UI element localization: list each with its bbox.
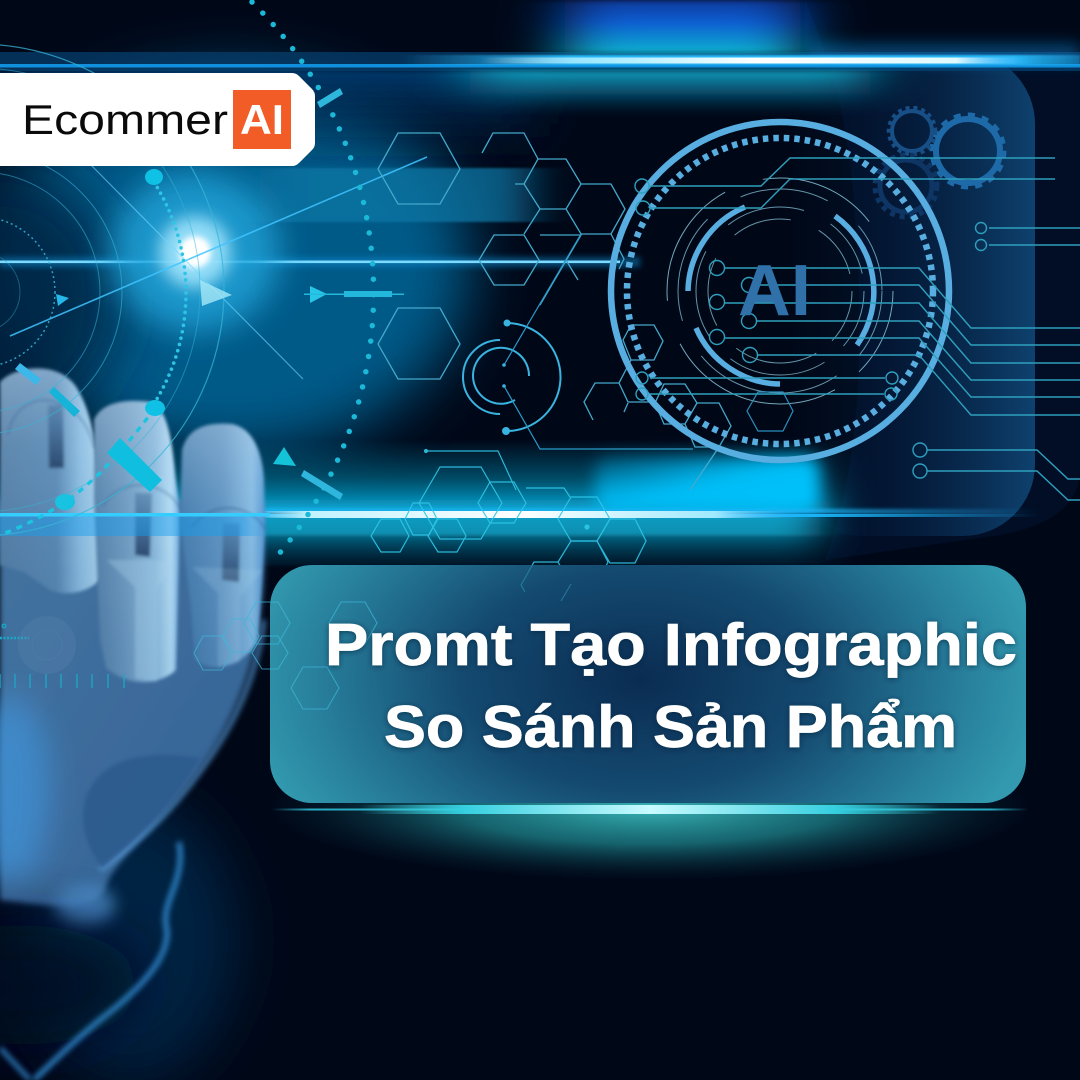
arc node bottom <box>145 400 165 416</box>
inner segmented arcs <box>688 207 874 384</box>
hexagon network <box>378 133 731 490</box>
small hexagon in emblem <box>747 392 793 431</box>
arc node top <box>145 169 163 185</box>
robot hand <box>0 368 270 1045</box>
title text <box>325 612 1017 760</box>
palm shadow bottom <box>0 925 140 1045</box>
finger three <box>180 424 265 668</box>
logo badge <box>0 73 315 166</box>
title line one: Promt Tạo Infographic <box>325 612 1017 678</box>
AI emblem <box>611 108 1080 500</box>
dotted arc inner <box>0 169 186 535</box>
cyan markers <box>15 88 404 500</box>
logo square <box>233 90 291 149</box>
palm <box>0 500 264 906</box>
title panel <box>194 562 1026 803</box>
outer ring <box>611 122 949 460</box>
dashed ring <box>627 138 933 444</box>
emblem label AI: AI <box>738 251 811 331</box>
light line across fingers <box>0 513 270 516</box>
HUD rings left <box>0 44 224 536</box>
logo AI: AI <box>240 96 284 143</box>
palm rim light <box>100 620 264 870</box>
light band across fingers <box>0 516 270 536</box>
thin arcs <box>667 178 893 404</box>
title underline glow <box>270 736 1030 880</box>
logo word: Ecommer <box>22 96 228 143</box>
middle light band <box>0 168 640 267</box>
dotted arc outer <box>252 2 374 562</box>
light flare <box>10 157 427 379</box>
palm glow <box>0 695 50 885</box>
hud ticks bottom left <box>0 616 124 688</box>
gears <box>875 108 1004 217</box>
wrist outline <box>0 842 180 1080</box>
hexagons on lower band <box>371 450 646 601</box>
lower light band <box>0 440 1040 566</box>
target icon <box>463 234 693 449</box>
palm base highlight <box>55 885 115 925</box>
top light band <box>0 0 1080 116</box>
arc node lower <box>55 494 75 510</box>
panel hexagons <box>194 562 571 709</box>
title line two: So Sánh Sản Phẩm <box>384 694 957 760</box>
finger two <box>94 401 180 682</box>
circuit lines <box>635 158 1080 500</box>
right glass panel <box>790 0 1080 560</box>
palm recess <box>83 755 200 868</box>
finger one <box>0 368 103 593</box>
